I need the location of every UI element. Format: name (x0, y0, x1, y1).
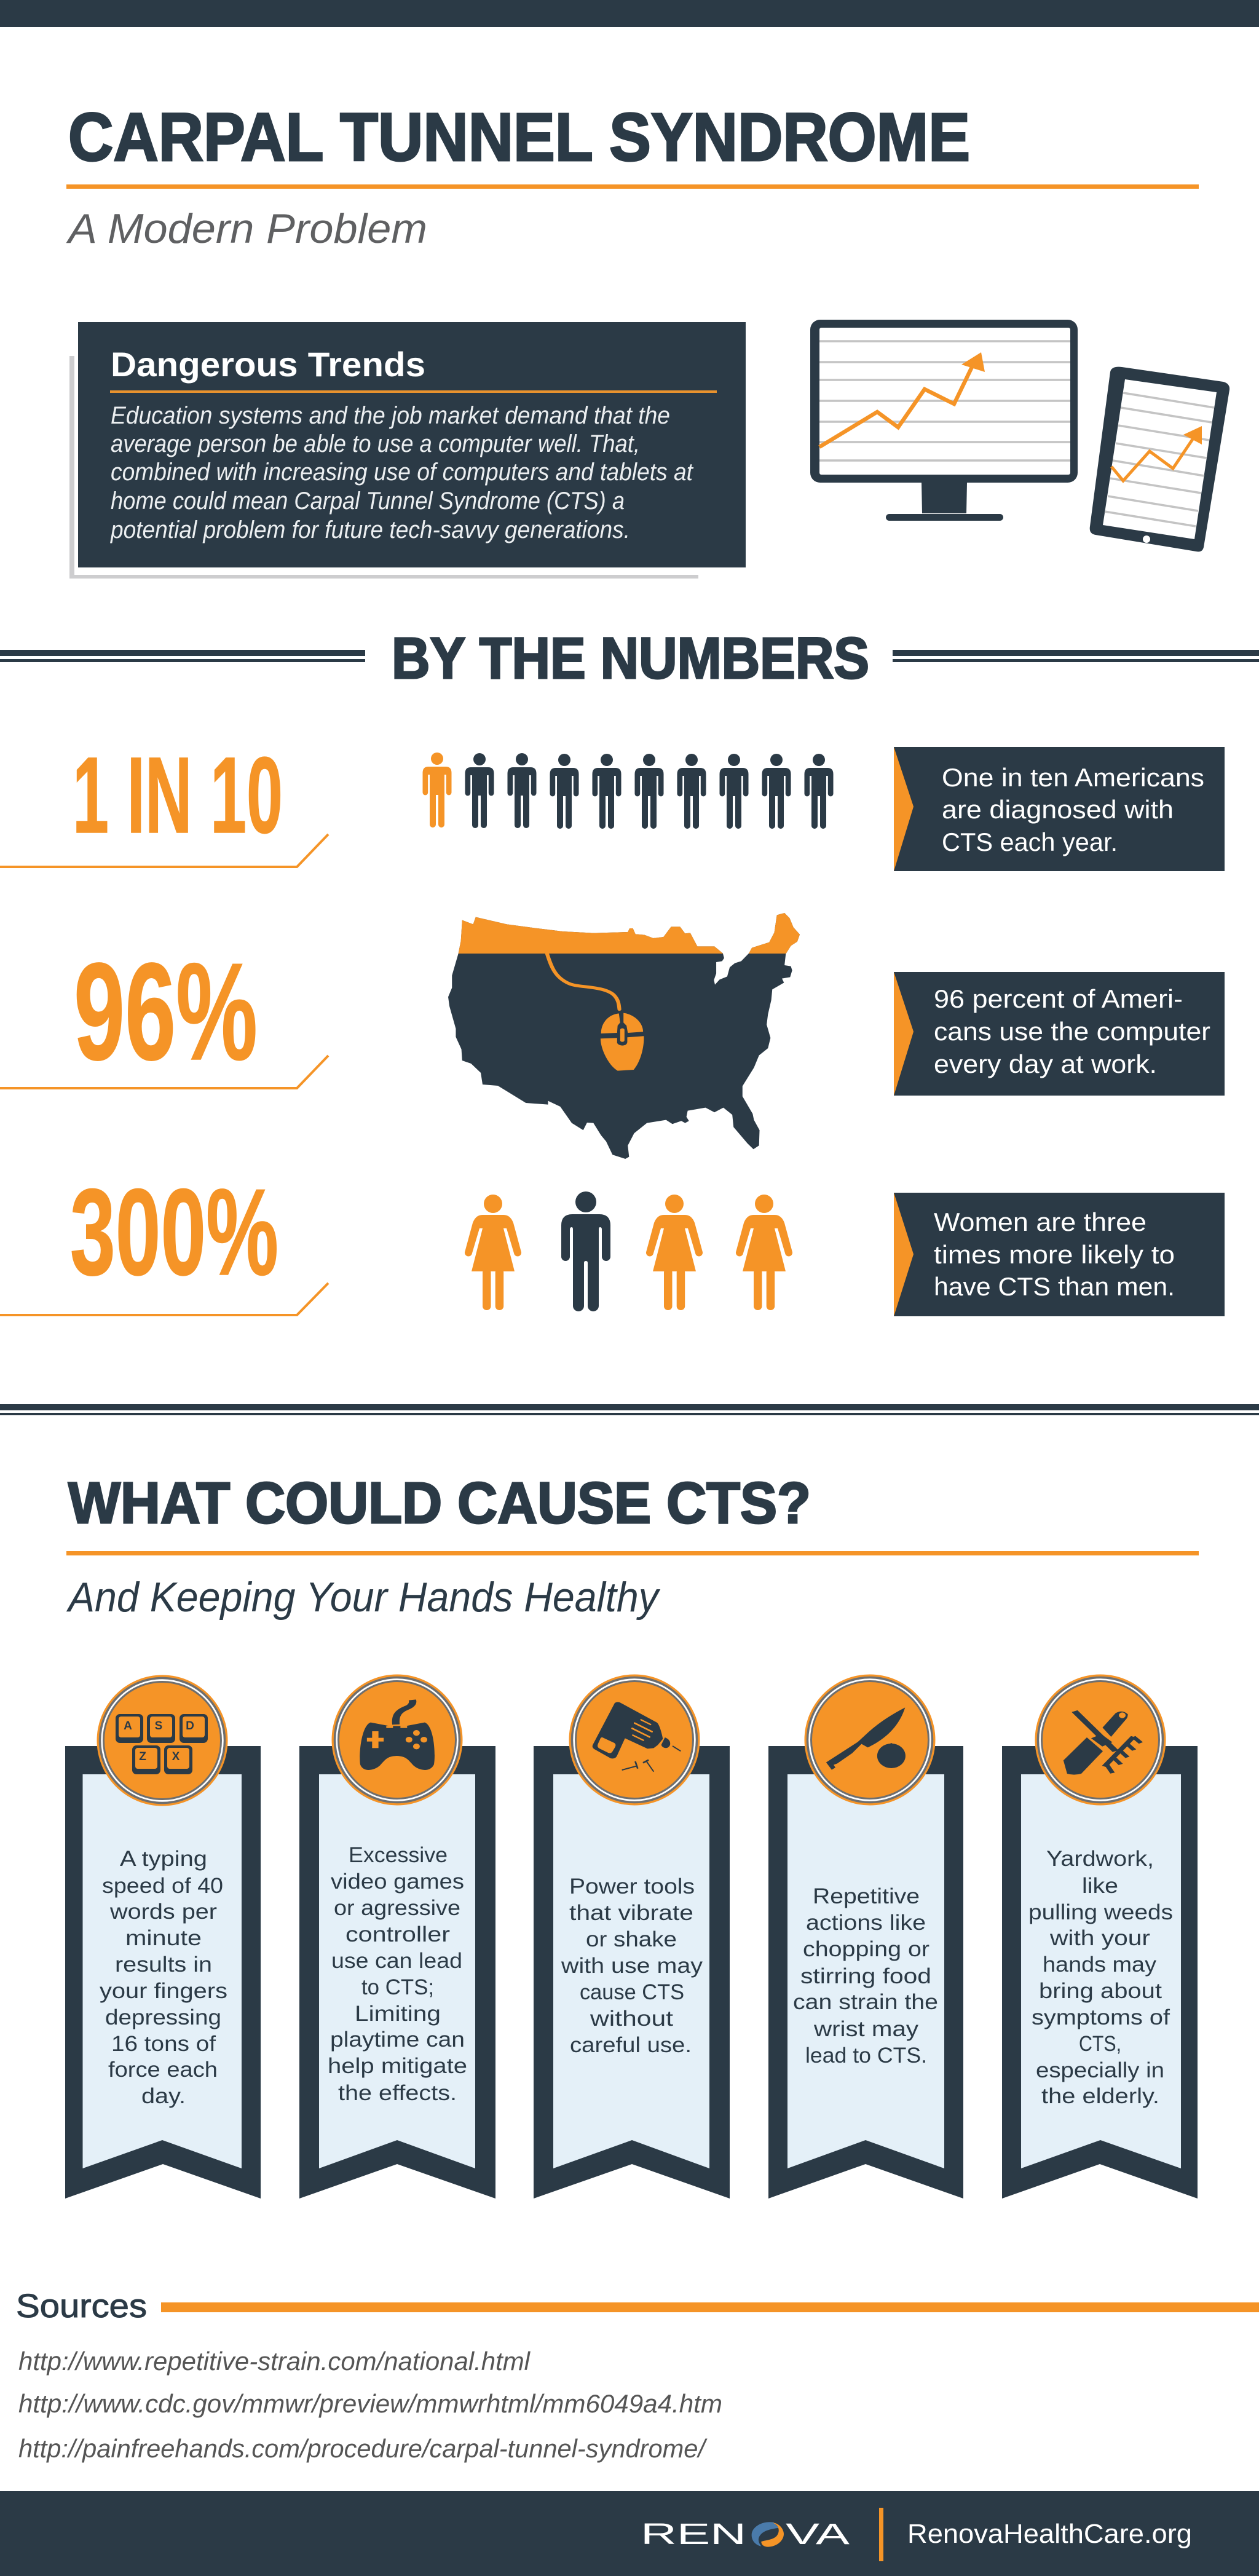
logo: Renova: VA (786, 2518, 850, 2551)
ribbon text: without (590, 2007, 673, 2031)
ribbon text: pulling weeds (1028, 1900, 1173, 1924)
ribbon text: actions like (806, 1911, 926, 1935)
stat: 96 percent: 96% (74, 934, 258, 1089)
footer (0, 2491, 1259, 2576)
ribbon: typing (65, 1675, 261, 2199)
icon: three women and one man (465, 1191, 792, 1311)
ribbon text: Repetitive (813, 1884, 920, 1908)
sources list: http://www.repetitive-strain.com/national.html (18, 2347, 531, 2376)
sources bar (161, 2302, 1259, 2312)
icon: keyboard keys: D (186, 1720, 194, 1732)
callout: women three times: times more likely to (934, 1240, 1175, 1269)
ribbon text: hands may (1043, 1953, 1157, 1977)
ribbon text: or agressive (334, 1896, 460, 1920)
icon: desktop monitor with rising chart (810, 320, 1078, 521)
ribbon text: symptoms of (1032, 2005, 1170, 2029)
ribbon text (1028, 1847, 1173, 2108)
ribbon text: stirring food (800, 1964, 931, 1988)
ribbon text (100, 1847, 227, 2108)
panel: dangerous trends (69, 322, 746, 579)
ribbon text: help mitigate (328, 2054, 467, 2078)
icon: game controller (332, 1675, 462, 1805)
panel body text: average person be able to use a computer well. That, (111, 430, 640, 457)
icon: keyboard keys: Z (139, 1750, 146, 1763)
title rule (66, 184, 1199, 189)
ribbon text (561, 1875, 703, 2057)
callout: ninety-six percent: every day at work. (934, 1049, 1157, 1078)
sources list (18, 2347, 722, 2463)
ribbon text: lead to CTS. (805, 2044, 927, 2068)
panel background (78, 322, 746, 567)
logo: Renova (641, 2518, 850, 2551)
section title: WHAT COULD CAUSE CTS? (68, 1471, 811, 1536)
ribbon text: video games (331, 1870, 464, 1894)
ribbon text: cause CTS (580, 1980, 684, 2004)
icon: keyboard keys: X (172, 1750, 180, 1763)
ribbon text: A typing (120, 1847, 207, 1871)
callout: women three times: Women are three (934, 1207, 1147, 1236)
ribbon text: to CTS; (361, 1975, 434, 1999)
callout: one in ten (894, 747, 1225, 871)
ribbon text: speed of 40 (102, 1874, 223, 1898)
stat: 300 percent (0, 1164, 328, 1315)
ribbon text: playtime can (330, 2028, 465, 2052)
ribbon text: day. (141, 2084, 186, 2108)
ribbon text: chopping or (803, 1937, 929, 1961)
ribbon text: with use may (561, 1954, 703, 1978)
ribbon text (793, 1884, 938, 2068)
ribbon: chopping (768, 1675, 963, 2199)
icon: keyboard keys (97, 1675, 227, 1806)
ribbon text: Power tools (569, 1875, 695, 1898)
ribbon text: controller (345, 1922, 450, 1946)
website: RenovaHealthCare.org (907, 2519, 1192, 2549)
section subtitle: And Keeping Your Hands Healthy (66, 1574, 661, 1621)
ribbon text: that vibrate (569, 1901, 693, 1925)
ribbon text: Limiting (355, 2002, 441, 2026)
callout: women three times: have CTS than men. (934, 1272, 1175, 1301)
ribbon text: Excessive (349, 1843, 448, 1867)
callout: one in ten: CTS each year. (942, 828, 1118, 856)
stat: 300 percent: 300% (70, 1164, 278, 1301)
panel body text: combined with increasing use of computers and tablets at (111, 459, 694, 486)
ribbon text: the effects. (338, 2081, 457, 2105)
header block (66, 100, 1199, 252)
ribbon text: CTS, (1079, 2032, 1121, 2056)
callout: ninety-six percent (894, 972, 1225, 1096)
panel rule (110, 390, 717, 393)
icon: row of ten people, one highlighted (423, 753, 834, 829)
ribbon text: 16 tons of (111, 2032, 216, 2056)
stat: 1 in 10 (0, 735, 328, 867)
ribbon text: bring about (1039, 1979, 1162, 2003)
heading: by the numbers (0, 626, 1259, 691)
panel body text: potential problem for future tech-savvy generations. (110, 516, 630, 543)
ribbon: yardwork (1002, 1675, 1198, 2199)
ribbon: power tools (534, 1675, 730, 2199)
callout: one in ten: One in ten Americans (942, 763, 1204, 792)
icon: power drill (569, 1675, 700, 1805)
stat: 1 in 10: 1 IN 10 (73, 735, 283, 856)
panel body text (110, 402, 694, 543)
ribbon text: especially in (1036, 2058, 1164, 2082)
ribbon: video games (299, 1675, 495, 2199)
section rule (66, 1551, 1199, 1555)
subtitle: A Modern Problem (66, 205, 427, 252)
ribbon text: like (1082, 1874, 1118, 1898)
panel heading: Dangerous Trends (111, 345, 425, 384)
logo: Renova: REN (641, 2518, 746, 2551)
sources heading: Sources (16, 2288, 147, 2325)
callout: ninety-six percent: cans use the computer (934, 1017, 1210, 1046)
ribbon text: or shake (586, 1927, 677, 1951)
ribbon text: words per (109, 1900, 217, 1924)
ribbon text: minute (125, 1926, 202, 1950)
ribbon text: your fingers (100, 1979, 227, 2003)
icon: US map with computer mouse (448, 913, 800, 1159)
callout: women three times (894, 1193, 1225, 1316)
top bar (0, 0, 1259, 27)
callout: one in ten: are diagnosed with (942, 795, 1174, 824)
panel shadow (69, 356, 698, 579)
ribbon text: careful use. (570, 2033, 692, 2057)
icon: knife and tomato (804, 1675, 936, 1805)
icon: tablet with rising chart (1090, 367, 1229, 551)
icon: garden tools (1035, 1675, 1166, 1805)
ribbon text: Yardwork, (1046, 1847, 1154, 1871)
callout: ninety-six percent: 96 percent of Ameri- (934, 984, 1183, 1013)
ribbon text: wrist may (813, 2017, 919, 2041)
icon: keyboard keys: S (155, 1720, 162, 1732)
panel body text: Education systems and the job market demand that the (111, 402, 670, 429)
ribbon text: use can lead (331, 1949, 462, 1973)
ribbon text (328, 1843, 467, 2105)
sources (16, 2288, 1259, 2463)
ribbon text: with your (1049, 1926, 1150, 1950)
heading: by the numbers: BY THE NUMBERS (392, 626, 869, 691)
ribbon text: results in (115, 1953, 212, 1977)
panel body text: home could mean Carpal Tunnel Syndrome (CTS) a (111, 488, 625, 515)
ribbon text: depressing (105, 2005, 221, 2029)
ribbon text: the elderly. (1041, 2084, 1159, 2108)
title: CARPAL TUNNEL SYNDROME (68, 100, 970, 175)
ribbon text: force each (108, 2058, 218, 2082)
sources list: http://painfreehands.com/procedure/carpal-tunnel-syndrome/ (18, 2434, 708, 2463)
ribbon text: can strain the (793, 1990, 938, 2014)
sources list: http://www.cdc.gov/mmwr/preview/mmwrhtml/mm6049a4.htm (18, 2389, 722, 2418)
icon: keyboard keys: A (124, 1720, 132, 1732)
section header: what could cause CTS (66, 1471, 1199, 1621)
